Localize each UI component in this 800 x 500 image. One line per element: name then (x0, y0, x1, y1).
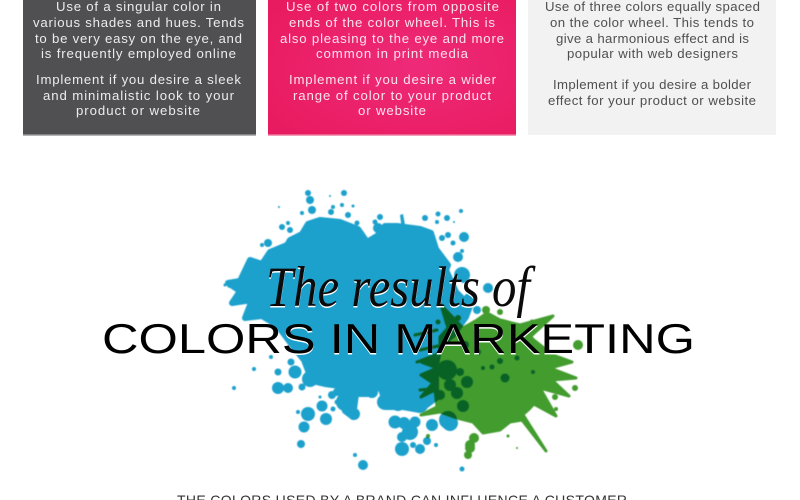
panel: complementary (268, 0, 516, 136)
panel: monochromatic (23, 0, 256, 136)
text: monochromatic description: to be very easy on the eye, and (35, 31, 242, 46)
icon: green paint splash (415, 305, 583, 459)
title: The results of: The results of (266, 256, 536, 319)
text: monochromatic description: and minimalistic look to your (43, 88, 235, 103)
panel: triadic (528, 0, 776, 135)
text: monochromatic description: various shades and hues. Tends (33, 15, 244, 30)
icon: blue paint splash (224, 190, 535, 472)
text: triadic description: give a harmonious effect and is (556, 31, 749, 46)
text: monochromatic description: product or website (76, 103, 200, 118)
text: complementary description: common in print media (316, 46, 469, 61)
text: monochromatic description: Implement if you desire a sleek (36, 72, 241, 87)
text: monochromatic description (33, 0, 244, 118)
text: triadic description (545, 0, 760, 108)
text: monochromatic description: is frequently employed online (41, 46, 236, 61)
text: complementary description: ends of the color wheel. This is (289, 15, 495, 30)
text: triadic description: on the color wheel. This tends to (550, 15, 754, 30)
text: triadic description: effect for your product or website (548, 93, 756, 108)
text: complementary description: also pleasing to the eye and more (280, 31, 504, 46)
title: COLORS IN MARKETING: COLORS IN MARKETING (102, 316, 695, 364)
text: triadic description: popular with web designers (567, 46, 738, 61)
title: The results of: The results of (266, 258, 536, 320)
text: complementary description (280, 0, 504, 118)
text: complementary description: Implement if you desire a wider (289, 72, 497, 87)
text: triadic description: Implement if you desire a bolder (553, 77, 752, 92)
text: complementary description: range of color to your product (293, 88, 491, 103)
title: COLORS IN MARKETING: COLORS IN MARKETING (102, 315, 695, 362)
text: complementary description: or website (358, 103, 426, 118)
